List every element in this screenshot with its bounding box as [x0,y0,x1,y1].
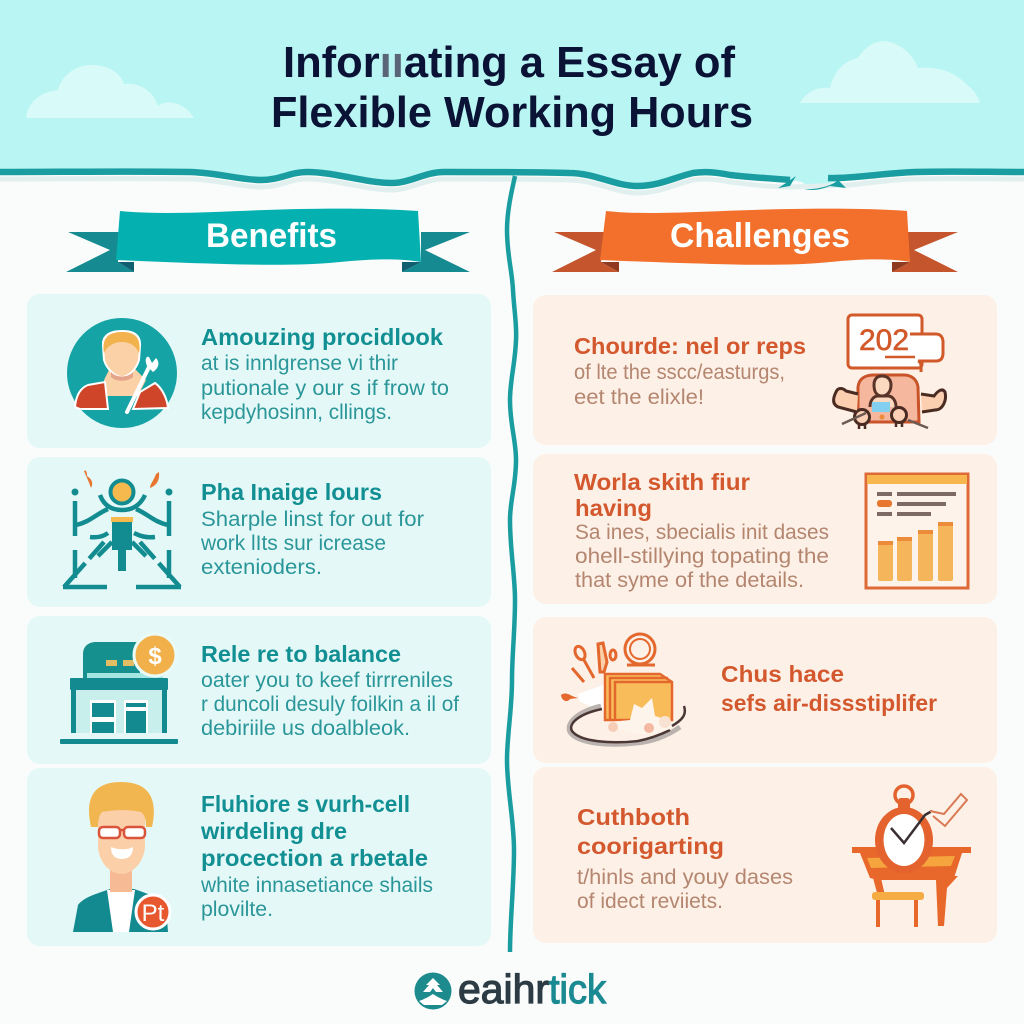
text: challenge 4: Cuthboth [577,804,690,830]
title: Inforııating a Essay of [283,38,735,87]
header band [0,0,1024,193]
text: challenge 3: sefs air-dissstiplifer [721,690,937,716]
text: benefit 3: Rele re to balance [201,641,401,667]
text: challenge 4 [577,804,793,913]
coin symbol: $ [148,643,162,670]
panel: challenge 3 [533,617,997,763]
text: benefit 1: kepdyhosinn, cllings. [201,401,392,424]
logo mark [414,972,452,1010]
text: benefit 3: oater you to keef tirrreniles [201,669,453,692]
text: benefit 4 [200,791,433,921]
cloud right [800,41,980,103]
cloud left [26,65,194,118]
text: challenge 2: ohell-stillying topating the [575,545,829,568]
banner label: challenges: Challenges [670,217,850,255]
icon: book on plate with tools [561,634,685,744]
text: benefit 4: wirdeling dre [200,818,347,844]
badge letters: Pt [142,900,165,927]
text: challenge 1: eet the elixle! [574,386,704,409]
logo wordmark: eaihr [458,966,549,1012]
text: benefit 1: at is innlgrense vi thir [201,352,398,375]
logo [414,966,606,1012]
text: benefit 3 [201,641,459,740]
icon: smiling man with glasses [73,782,170,932]
panel: benefit 4 [27,768,491,946]
panel: challenge 1 [533,295,997,445]
icon: report with bar chart [866,474,968,588]
text: benefit 2 [200,479,424,579]
text: challenge 3: Chus hace [721,661,844,687]
panel: challenge 2 [533,454,997,604]
text: challenge 2: having [575,495,652,521]
text: challenge 1: of lte the sscc/easturgs, [574,361,785,384]
text: challenge 4: t/hinls and youy dases [577,866,793,889]
text: benefit 2: Pha Inaige lours [201,479,382,505]
text: benefit 1: Amouzing procidlook [201,324,443,350]
text: benefit 3: debiriile us doalbleok. [201,717,410,740]
bubble number: 202 [859,324,909,357]
text: challenge 2: Sa ines, sbecialis init dases [575,521,829,544]
icon: speech bubbles and team [834,315,946,429]
text: benefit 4: plovilte. [201,898,273,921]
text: benefit 4: Fluhiore s vurh-cell [201,791,410,817]
banner label: benefits: Benefits [206,217,337,255]
panel: challenge 4 [533,767,997,943]
text: challenge 2: Worla skith fiur [574,469,750,495]
text: benefit 2: extenioders. [201,556,322,579]
panel: benefit 1 [27,294,491,448]
text: challenge 2 [574,469,829,592]
text: challenge 1: Chourde: nel or reps [574,333,806,359]
center divider [507,176,516,952]
banner: challenges [552,209,958,272]
icon: clock on desk [852,786,971,927]
panel: benefit 2 [27,457,491,607]
title [271,38,753,137]
banner: benefits [66,209,470,272]
text: benefit 3: r duncoli desuly foilkin a il of [201,693,459,716]
text: benefit 4: procection a rbetale [201,845,428,871]
text: challenge 4: coorigarting [577,833,724,859]
title: Flexible Working Hours [271,88,753,137]
text: benefit 1: putionale y our s if frow to [201,377,449,400]
text: challenge 2: that syme of the details. [575,569,804,592]
icon: bank building with coin [60,634,178,744]
text: benefit 4: white innasetiance shails [200,874,433,897]
icon: worker with wrench [67,318,177,428]
text: benefit 2: work lIts sur icrease [200,532,386,555]
panel: benefit 3 [27,616,491,764]
text: challenge 4: of idect reviiets. [577,890,723,913]
text: benefit 1 [201,324,449,424]
logo: tick [549,966,606,1012]
icon: figure with raised arms [63,471,181,587]
text: benefit 2: Sharple linst for out for [201,508,424,531]
text: challenge 3 [721,661,937,716]
text: challenge 1 [574,333,806,409]
